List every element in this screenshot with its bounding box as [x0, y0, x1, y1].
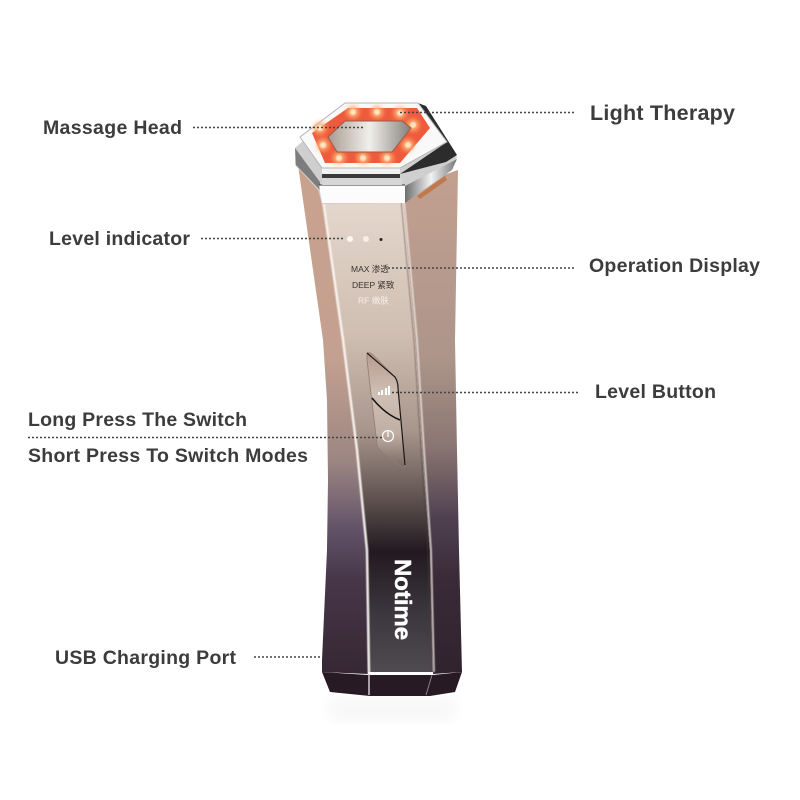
label: level indicator: Level indicator: [49, 228, 190, 250]
side port accent: [417, 176, 447, 199]
operation display labels: MAX 渗透: [351, 264, 389, 274]
panel edge highlights: [323, 200, 369, 674]
label: long press: Long Press The Switch: [28, 409, 247, 431]
collar left face: [295, 148, 320, 190]
operation display labels: DEEP 紧致: [352, 280, 395, 290]
control buttons: [367, 353, 405, 467]
label: massage head: Massage Head: [43, 117, 182, 139]
collar right face: [405, 159, 457, 203]
mirror electrode: [328, 121, 411, 152]
leader lines: [28, 112, 578, 657]
icon: signal bars: [378, 386, 390, 395]
base: [322, 672, 462, 696]
icon: power symbol: [382, 430, 394, 442]
top plate: [300, 103, 447, 168]
collar front face: [319, 185, 405, 203]
left side face: [298, 165, 368, 674]
button plate: [367, 353, 405, 467]
label: operation display: Operation Display: [589, 255, 760, 277]
product reflection: [326, 698, 458, 722]
lower tiers: [322, 167, 400, 174]
operation display labels: RF 嫩肤: [358, 296, 389, 306]
button divider: [372, 398, 400, 420]
front panel: [322, 190, 433, 672]
chrome collar: [295, 103, 457, 204]
device: handset: [298, 165, 462, 696]
label: light therapy: Light Therapy: [590, 101, 735, 125]
level indicator dots: [347, 236, 382, 242]
label: level button: Level Button: [595, 381, 716, 403]
label: short press: Short Press To Switch Modes: [28, 445, 308, 467]
label: usb port: USB Charging Port: [55, 647, 236, 669]
brand logo: Notime: [390, 559, 416, 640]
operation display labels: [351, 264, 395, 306]
button outline: [367, 353, 405, 465]
LED ring: [312, 108, 430, 163]
massage head: [295, 103, 457, 204]
right side face: [402, 170, 462, 674]
dark bevel: [400, 103, 457, 174]
LED glow dots: [314, 106, 419, 164]
